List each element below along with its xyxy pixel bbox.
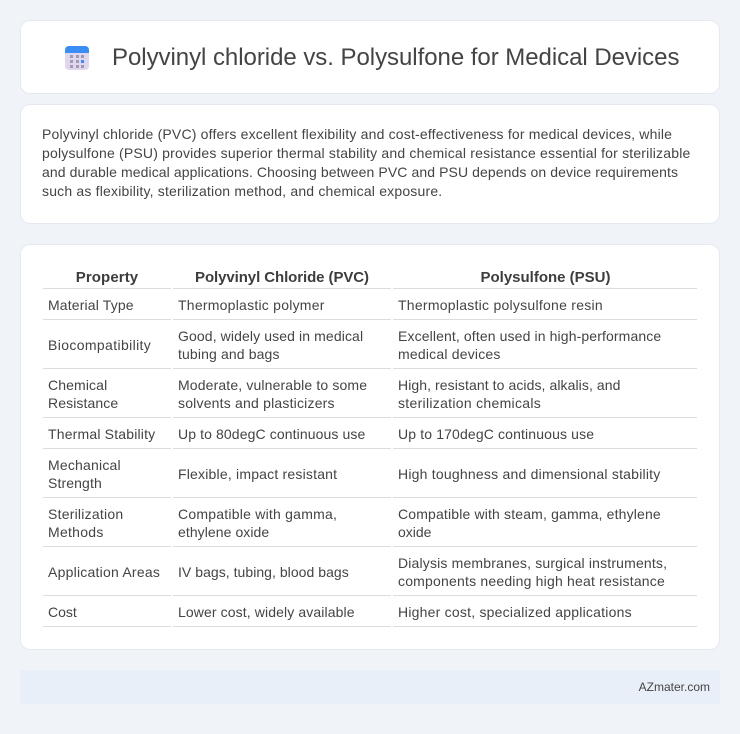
row: application areas: Application Areas — [48, 564, 160, 580]
row: sterilization methods: Compatible with gamma, — [178, 506, 337, 522]
row: chemical resistance: sterilization chemicals — [398, 395, 541, 411]
row: thermal stability: Up to 170degC continuous use — [398, 426, 594, 442]
row: sterilization methods: ethylene oxide — [178, 524, 269, 540]
table header: Property — [76, 269, 138, 286]
row: application areas: IV bags, tubing, blood bags — [178, 564, 349, 580]
footer credit: AZmater.com — [639, 680, 710, 694]
row: application areas: components needing high heat resistance — [398, 573, 665, 589]
row: mechanical strength: Mechanical — [48, 457, 121, 473]
row: cost: Lower cost, widely available — [178, 604, 355, 620]
row: mechanical strength: Flexible, impact resistant — [178, 466, 337, 482]
icon: calendar — [65, 46, 89, 70]
row: material type: Thermoplastic polysulfone resin — [398, 297, 603, 313]
row: biocompatibility: Good, widely used in medical — [178, 328, 363, 344]
comparison table — [43, 269, 697, 627]
row: cost: Higher cost, specialized applications — [398, 604, 632, 620]
row: biocompatibility: medical devices — [398, 346, 501, 362]
row: application areas — [48, 555, 667, 589]
row: mechanical strength: High toughness and dimensional stability — [398, 466, 661, 482]
row: application areas: Dialysis membranes, surgical instruments, — [398, 555, 667, 571]
row: chemical resistance: Resistance — [48, 395, 118, 411]
comparison table card — [20, 244, 720, 650]
summary text: Polyvinyl chloride (PVC) offers excellent flexibility and cost-effectiveness for medical devices, while — [42, 126, 672, 142]
summary text — [42, 126, 690, 199]
row: cost: Cost — [48, 604, 77, 620]
row: chemical resistance: High, resistant to acids, alkalis, and — [398, 377, 620, 393]
row: sterilization methods: Methods — [48, 524, 104, 540]
table header: Polyvinyl Chloride (PVC) — [195, 269, 369, 286]
row: biocompatibility: Excellent, often used in high-performance — [398, 328, 661, 344]
summary text: polysulfone (PSU) provides superior thermal stability and chemical resistance essential for sterilizable — [42, 145, 690, 161]
summary text: and durable medical applications. Choosing between PVC and PSU depends on device requirements — [42, 164, 678, 180]
row: thermal stability — [48, 426, 594, 442]
row: biocompatibility — [48, 328, 661, 362]
title: Polyvinyl chloride vs. Polysulfone for Medical Devices — [112, 44, 679, 71]
row: material type: Thermoplastic polymer — [178, 297, 325, 313]
row: mechanical strength — [48, 457, 661, 491]
row: biocompatibility: Biocompatibility — [48, 337, 151, 353]
row: cost — [48, 604, 632, 620]
row: mechanical strength: Strength — [48, 475, 102, 491]
row: chemical resistance: Moderate, vulnerable to some — [178, 377, 367, 393]
summary text: such as flexibility, sterilization method, and chemical exposure. — [42, 183, 442, 199]
row: thermal stability: Up to 80degC continuous use — [178, 426, 365, 442]
row: sterilization methods — [48, 506, 661, 540]
row: material type: Material Type — [48, 297, 134, 313]
row: thermal stability: Thermal Stability — [48, 426, 155, 442]
table header — [76, 269, 610, 286]
row: biocompatibility: tubing and bags — [178, 346, 280, 362]
row: sterilization methods: oxide — [398, 524, 431, 540]
title card — [20, 20, 720, 94]
row: sterilization methods: Sterilization — [48, 506, 123, 522]
row: chemical resistance — [48, 377, 620, 411]
row: chemical resistance: Chemical — [48, 377, 107, 393]
summary card — [20, 104, 720, 224]
footer bar — [20, 670, 720, 704]
row: sterilization methods: Compatible with steam, gamma, ethylene — [398, 506, 661, 522]
row: material type — [48, 297, 603, 313]
row: chemical resistance: solvents and plasticizers — [178, 395, 335, 411]
table header: Polysulfone (PSU) — [480, 269, 610, 286]
